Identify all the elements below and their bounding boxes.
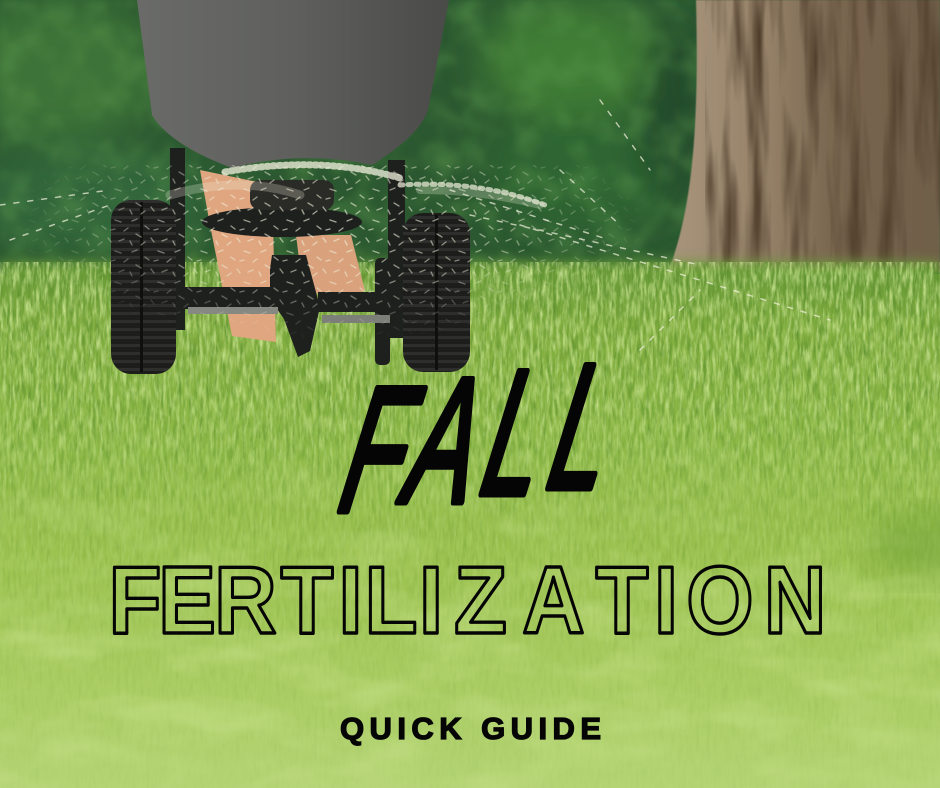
title: FALL: FALL	[328, 328, 632, 550]
icon: hopper	[137, 0, 449, 168]
icon: right wheel	[403, 213, 470, 372]
title: FERTILIZATION: FERTILIZATION	[109, 547, 826, 654]
legs behind the spreader	[200, 170, 365, 342]
subtitle: QUICK GUIDE: QUICK GUIDE	[340, 711, 601, 746]
spreader machine	[111, 0, 470, 374]
background: tree trunk	[668, 0, 940, 272]
background: lawn	[0, 262, 940, 788]
frame	[170, 148, 405, 365]
fertilizer spray	[0, 99, 831, 351]
background: blurred foliage	[0, 0, 940, 290]
icon: left wheel	[111, 200, 176, 374]
